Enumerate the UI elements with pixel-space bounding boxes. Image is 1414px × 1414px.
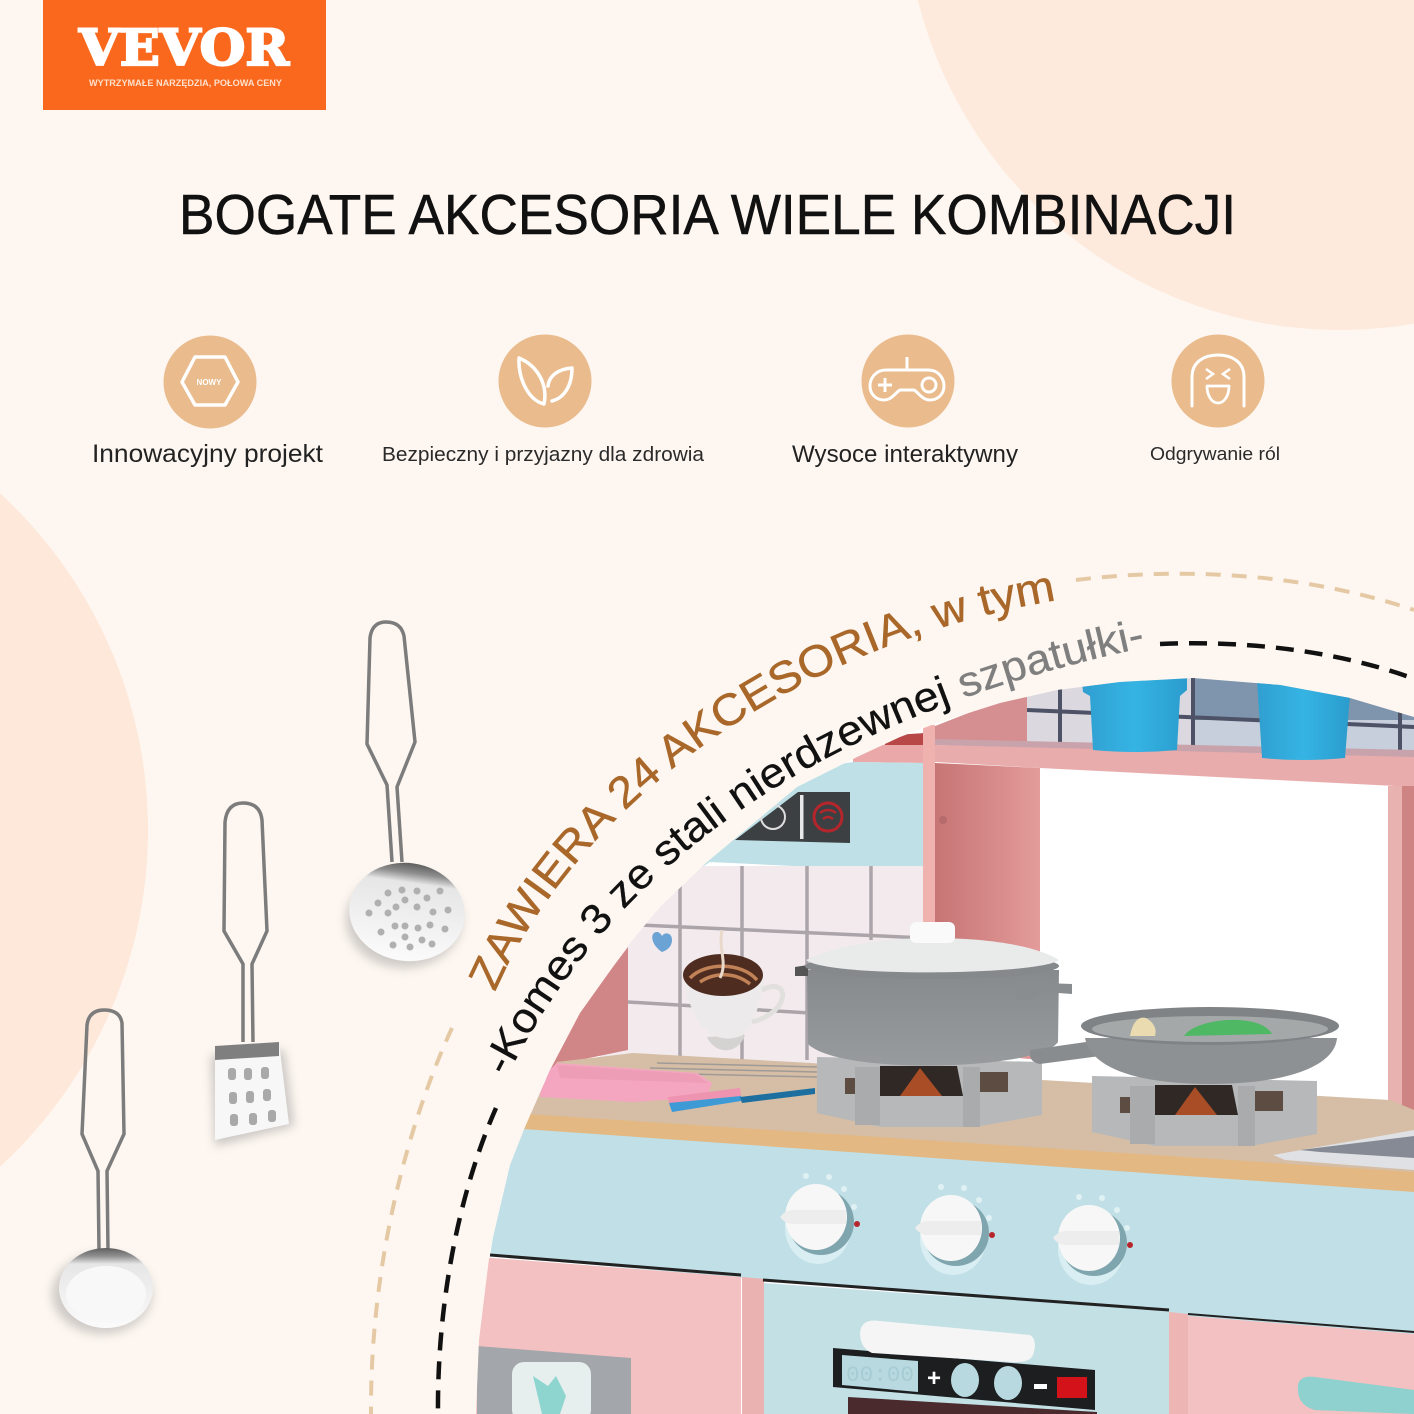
upper shelf — [853, 733, 1414, 787]
dashed arc: beige — [371, 574, 1414, 1414]
title: BOGATE AKCESORIA WIELE KOMBINACJI — [179, 183, 1236, 247]
small timer — [820, 872, 858, 893]
curved text: three spatulas: -Komes 3 ze stali nierdzewnej szpatułki- — [490, 621, 1142, 1072]
icon: hexagon new — [164, 336, 256, 428]
icon: laughing face — [1172, 334, 1264, 428]
coffee cup — [683, 930, 783, 1050]
feature: safe and healthy — [382, 334, 705, 466]
oven control panel: + — [927, 1365, 941, 1392]
label: Wysoce interaktywny — [792, 441, 1018, 468]
sink edge — [1273, 1130, 1414, 1170]
left pink door — [470, 1255, 741, 1414]
knob 2 — [915, 1184, 995, 1275]
logo: VEVOR — [43, 0, 326, 110]
blue knife — [668, 1088, 815, 1112]
back wall tiles — [935, 678, 1414, 750]
feature: highly interactive — [792, 334, 1018, 468]
tile wall — [600, 866, 925, 1066]
peach circle top right — [905, 0, 1414, 330]
grille reflection — [645, 1063, 817, 1077]
utensil: skimmer — [343, 622, 471, 969]
oven window — [848, 1397, 1097, 1414]
oven control panel: 00:00 — [846, 1363, 914, 1388]
knob 1 — [780, 1173, 860, 1264]
left pink side wall — [545, 947, 628, 1080]
wood edge — [520, 1114, 1414, 1195]
oven handle — [860, 1320, 1035, 1362]
dashed arc: black — [438, 643, 1412, 1414]
blue cabinet panel — [490, 1128, 1414, 1336]
curved text: accessories: ZAWIERA 24 AKCESORIA, w tym — [468, 578, 1054, 992]
blue cups — [1082, 678, 1350, 760]
pink right strip — [1169, 1312, 1188, 1414]
range hood — [702, 762, 923, 867]
photo: toy kitchen — [470, 670, 1414, 1414]
pink cutting board — [540, 1063, 712, 1102]
icon: game controller — [862, 334, 954, 428]
peach circle left — [0, 373, 148, 1287]
pot lid — [805, 922, 1059, 972]
countertop — [526, 1053, 1414, 1180]
logo: VEVOR: WYTRZYMAŁE NARZĘDZIA, POŁOWA CENY — [89, 78, 283, 89]
burner stand — [817, 1057, 1042, 1127]
label: Innowacyjny projekt — [92, 440, 323, 468]
hood panel — [735, 792, 850, 843]
feature: role play — [1150, 334, 1280, 464]
utensil: ladle — [52, 1010, 153, 1334]
oven door — [763, 1280, 1169, 1414]
pan burner stand — [1092, 1076, 1317, 1146]
utensil: spatula — [211, 803, 294, 1146]
right pink door — [1188, 1314, 1414, 1414]
grey panel — [477, 1346, 631, 1414]
label: Bezpieczny i przyjazny dla zdrowia — [382, 444, 705, 466]
teal handle — [1298, 1377, 1414, 1414]
logo: VEVOR: VEVOR — [78, 18, 289, 77]
pink divider — [742, 1277, 764, 1414]
pink post — [923, 725, 1414, 1131]
oven control panel — [833, 1348, 1095, 1410]
icon: leaves — [498, 334, 592, 428]
label: Odgrywanie ról — [1150, 444, 1280, 464]
icon: hexagon new: NOWY — [197, 378, 222, 387]
knob 3 — [1053, 1194, 1133, 1285]
heart — [652, 932, 672, 952]
large pot — [795, 922, 1072, 1127]
frying pan — [1030, 1007, 1339, 1146]
feature: innovative design — [92, 336, 323, 468]
